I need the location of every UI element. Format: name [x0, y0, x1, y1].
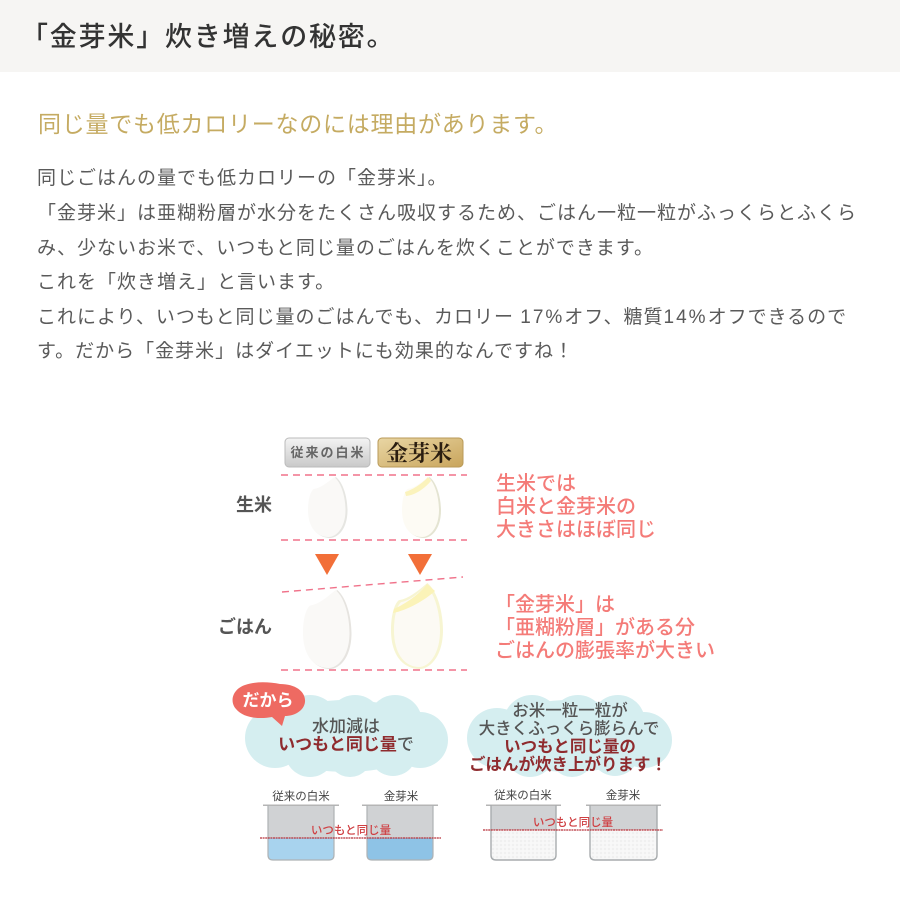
rice level line and label: いつもと同じ量	[533, 816, 613, 829]
arrow: kinmemai	[408, 554, 432, 575]
body paragraph: み、少ないお米で、いつもと同じ量のごはんを炊くことができます。	[37, 238, 654, 259]
body paragraph: これにより、いつもと同じ量のごはんでも、カロリー 17%オフ、糖質14%オフできるので	[37, 307, 847, 328]
callout text: cooked rice	[495, 593, 715, 662]
pot: white rice cooked	[486, 788, 561, 860]
pot: kinmemai cooked	[586, 789, 661, 860]
callout text: raw rice: 生米では	[496, 472, 576, 495]
cloud text: right: 大きくふっくら膨らんで	[479, 719, 659, 738]
icon: raw kinmemai grain	[402, 477, 441, 538]
cloud text: right: ごはんが炊き上がります！	[469, 754, 667, 774]
row label: 生米: 生米	[236, 495, 272, 515]
cloud text: left: 水加減は	[312, 717, 380, 736]
callout badge: だから: だから	[242, 691, 294, 710]
pot: kinmemai water: 金芽米	[384, 790, 419, 803]
dashed guide lines	[281, 475, 467, 670]
pot: white rice water: 従来の白米	[272, 789, 330, 803]
callout text: cooked rice: 「金芽米」は	[495, 593, 615, 616]
cloud text: right: いつもと同じ量の	[504, 737, 636, 756]
badge: 金芽米: 金芽米	[386, 441, 452, 466]
body paragraph: これを「炊き増え」と言います。	[37, 272, 335, 293]
arrow: white rice	[315, 554, 339, 575]
cloud text: right	[469, 700, 667, 774]
body paragraph: 「金芽米」は亜糊粉層が水分をたくさん吸収するため、ごはん一粒一粒がふっくらとふくら	[37, 203, 857, 224]
cloud text: right: お米一粒一粒が	[512, 700, 628, 720]
body paragraph	[37, 168, 857, 362]
cloud text: left: いつもと同じ量で	[278, 735, 414, 754]
body paragraph: 同じごはんの量でも低カロリーの「金芽米」。	[37, 168, 448, 189]
cloud: left	[245, 695, 448, 777]
pot: kinmemai cooked: 金芽米	[606, 789, 641, 802]
subheading: 同じ量でも低カロリーなのには理由があります。	[38, 111, 558, 137]
callout text: raw rice: 大きさはほぼ同じ	[496, 518, 656, 541]
cloud text: left	[278, 717, 414, 754]
cloud: right	[467, 695, 672, 777]
badge: 従来の白米: 従来の白米	[290, 445, 366, 460]
pot: white rice water	[263, 789, 339, 860]
icon: cooked white rice grain	[303, 590, 352, 669]
water level line and label: いつもと同じ量	[311, 824, 391, 837]
badge: 従来の白米	[285, 438, 370, 467]
callout text: cooked rice: 「亜糊粉層」がある分	[495, 616, 695, 639]
header band	[0, 0, 900, 72]
badge: 金芽米	[378, 438, 463, 467]
body paragraph: す。だから「金芽米」はダイエットにも効果的なんですね！	[37, 341, 574, 362]
pot: white rice cooked: 従来の白米	[494, 788, 552, 802]
pot: kinmemai water	[362, 790, 438, 860]
callout badge: だから	[233, 682, 305, 726]
callout text: raw rice: 白米と金芽米の	[496, 495, 636, 518]
callout text: raw rice	[496, 472, 656, 541]
icon: cooked kinmemai grain	[391, 583, 443, 669]
row label: ごはん: ごはん	[218, 616, 272, 637]
title: 「金芽米」炊き増えの秘密。	[21, 22, 395, 52]
icon: raw white rice grain	[308, 477, 348, 538]
callout text: cooked rice: ごはんの膨張率が大きい	[495, 639, 715, 662]
